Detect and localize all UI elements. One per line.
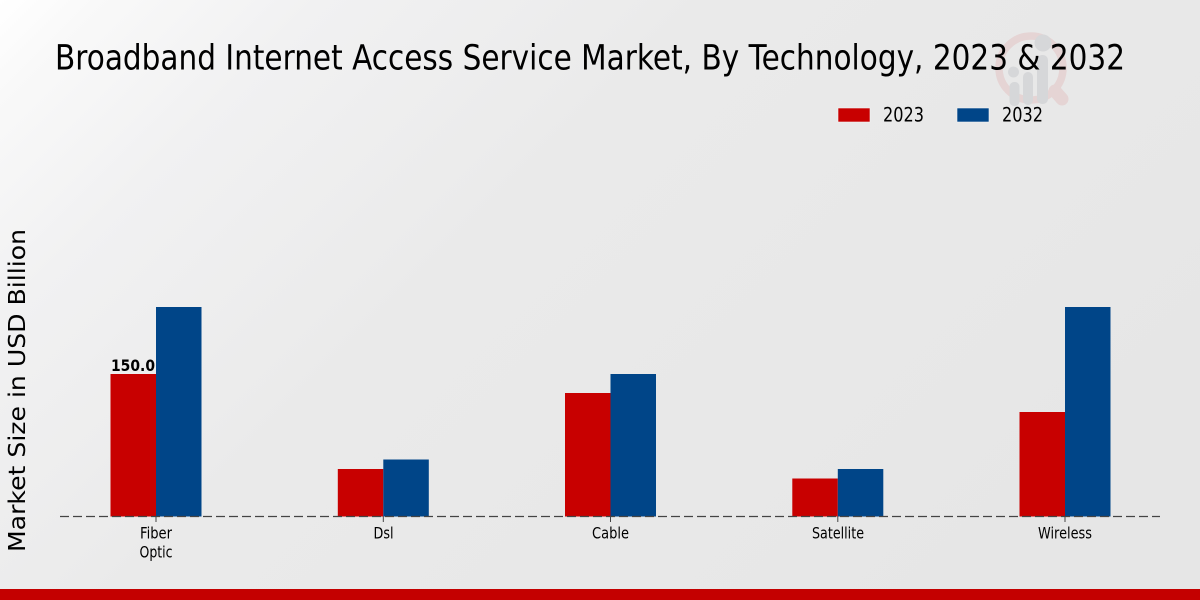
bars: Wireless	[1020, 307, 1110, 516]
x axis labels: Satellite	[812, 524, 864, 542]
legend	[838, 104, 1043, 126]
bars: Satellite	[792, 469, 883, 516]
bars: Dsl	[338, 460, 429, 516]
x axis labels: Optic	[140, 542, 172, 562]
y axis label: Market Size in USD Billion	[5, 229, 31, 552]
bars: Cable	[565, 374, 656, 516]
x axis labels	[140, 524, 1092, 562]
x axis labels: Cable	[592, 524, 629, 542]
footer bar	[0, 589, 1200, 600]
legend item: 2032	[957, 104, 1043, 126]
legend item: 2023: 2023	[883, 104, 924, 126]
x axis labels: Wireless	[1038, 524, 1092, 542]
x axis labels: Dsl	[374, 524, 394, 542]
legend item: 2032: 2032	[1002, 104, 1043, 126]
bars: Fiber Optic	[110, 307, 202, 516]
x axis labels: Fiber	[140, 524, 172, 542]
value label: 150.0	[111, 356, 155, 375]
legend item: 2023	[838, 104, 924, 126]
bar chart	[60, 307, 1160, 562]
icon: watermark logo	[999, 34, 1063, 106]
